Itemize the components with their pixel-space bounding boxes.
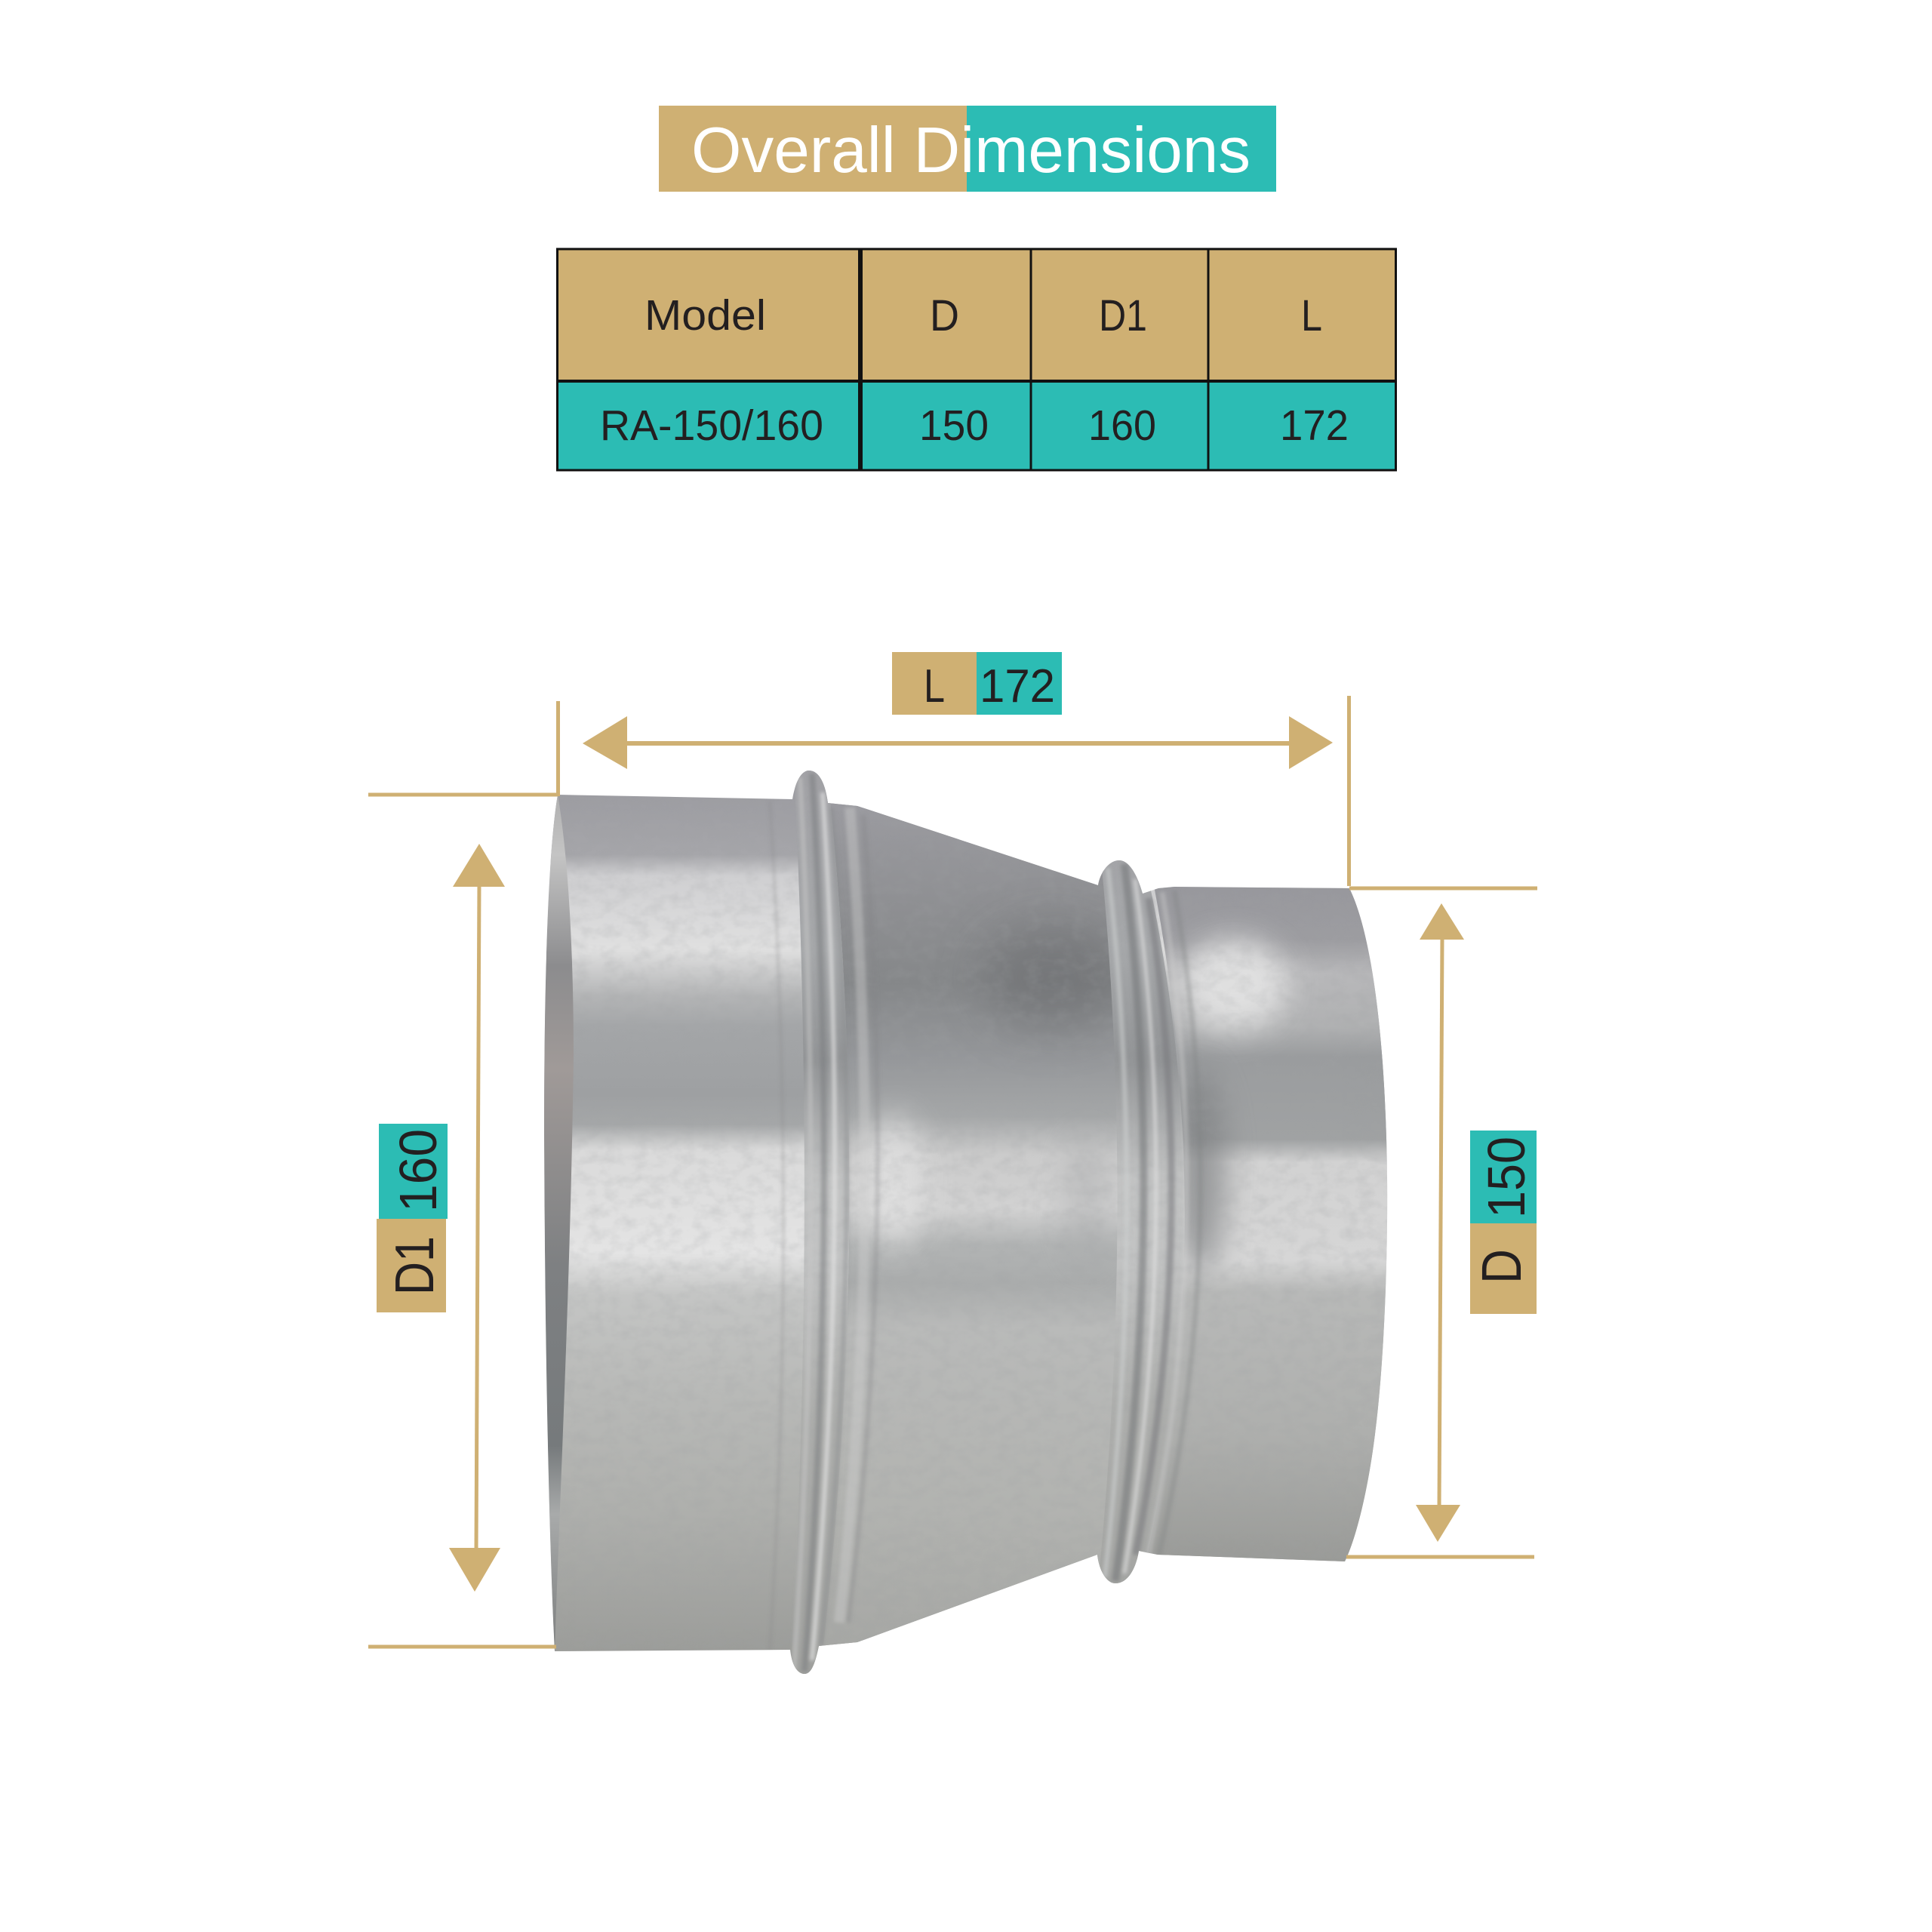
D dimension label: D — [1470, 1249, 1533, 1284]
title: Overall Dimensions — [691, 115, 1251, 186]
dimensions table: 172 — [1280, 401, 1349, 450]
arrow: L width — [583, 716, 1333, 769]
L dimension label: L — [924, 660, 945, 712]
D dimension label — [1470, 1131, 1537, 1314]
dimensions table: 150 — [919, 401, 989, 450]
dimensions table: Model — [645, 291, 766, 340]
dimensions table: D1 — [1099, 291, 1147, 340]
D1 dimension label: 160 — [389, 1129, 448, 1212]
duct reducer illustration — [528, 755, 1404, 1690]
arrow: D height — [1416, 903, 1464, 1542]
dimensions table: 160 — [1088, 401, 1156, 450]
D1 dimension label: D1 — [385, 1236, 445, 1295]
extension lines — [368, 696, 1537, 1647]
dimensions table: D — [930, 291, 959, 340]
D dimension label: 150 — [1477, 1137, 1536, 1218]
dimensions table: L — [1301, 291, 1322, 340]
dimensions table — [557, 249, 1396, 471]
L dimension label — [892, 652, 1062, 715]
dimensions table: RA-150/160 — [600, 401, 823, 450]
L dimension label: 172 — [980, 660, 1055, 712]
arrow: D1 height — [449, 844, 505, 1592]
D1 dimension label — [377, 1124, 448, 1312]
